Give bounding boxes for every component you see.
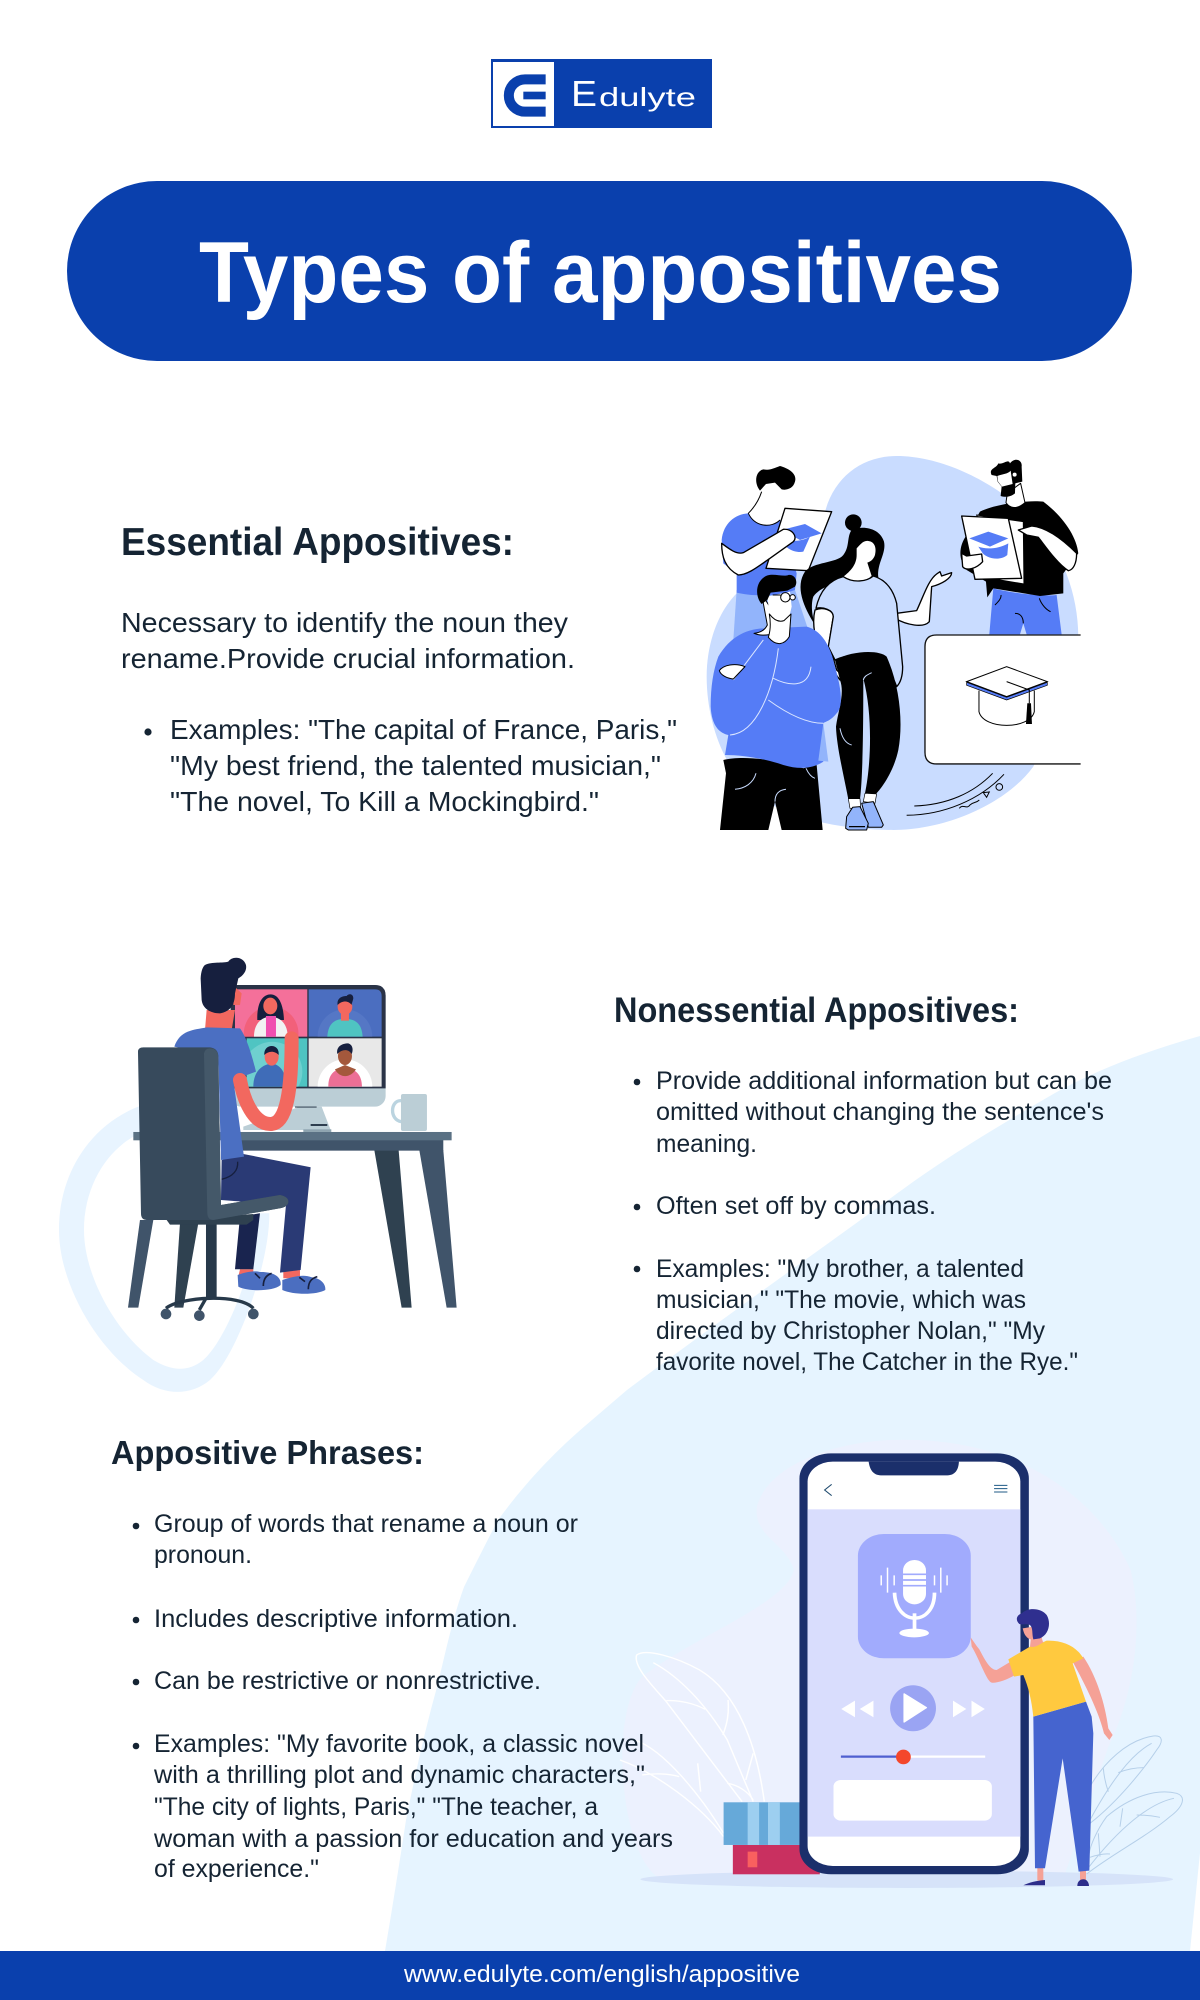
bullet: examples (144, 714, 677, 817)
person (1037, 1867, 1086, 1881)
bullet: examples: musician," "The movie, which was (656, 1286, 1026, 1314)
menu icon (994, 1485, 1007, 1492)
bullet: additional information: Provide additional information but can be (656, 1067, 1112, 1095)
microphone card (858, 1534, 971, 1658)
bullet: commas: Often set off by commas. (656, 1192, 936, 1220)
bullet: additional information: omitted without changing the sentence's (656, 1098, 1104, 1126)
bullet: examples: of experience." (154, 1855, 319, 1883)
phone (799, 1453, 1029, 1874)
video tile people (253, 994, 363, 1087)
office chair (128, 1047, 288, 1321)
illustration: group of students with graduation cap tablets (707, 456, 1081, 830)
bullet: additional information (634, 1067, 1112, 1158)
neck (754, 597, 780, 635)
progress slider (841, 1753, 903, 1760)
bullet: examples: "The novel, To Kill a Mockingbird." (170, 786, 599, 817)
heading: essential appositives: Essential Appositives: (121, 521, 514, 564)
woman legs (835, 652, 901, 799)
bullet: examples (133, 1730, 673, 1883)
logo wordmark: dulyte (599, 82, 696, 112)
bullet: examples: "My best friend, the talented musician," (170, 750, 661, 781)
man at computer (174, 958, 325, 1294)
illustration: man on video call at desk (59, 958, 457, 1392)
title: Types of appositives (199, 225, 1002, 321)
woman (801, 514, 952, 830)
woman left arm (814, 609, 848, 681)
icon: Edulyte mark (509, 79, 546, 112)
person and blue leaves (971, 1609, 1182, 1886)
man front-left (711, 575, 841, 830)
soft blob (622, 1440, 1137, 1877)
pale loop (59, 1106, 269, 1392)
bullet: examples: favorite novel, The Catcher in the Rye." (656, 1348, 1078, 1376)
man right with tablet (960, 460, 1078, 634)
blue leaves (1087, 1736, 1182, 1874)
bullet: descriptive information: Includes descriptive information. (154, 1605, 518, 1633)
phone scene (620, 1440, 1173, 1888)
bullet: additional information: meaning. (656, 1130, 757, 1158)
bullet: examples: with a thrilling plot and dynamic characters," (153, 1761, 645, 1789)
text block: definition (121, 607, 575, 674)
monitor (231, 985, 386, 1132)
decorative marks (907, 773, 1004, 815)
bullet: restrictive: Can be restrictive or nonrestrictive. (154, 1667, 541, 1695)
heading: nonessential appositives: Nonessential Appositives: (614, 991, 1019, 1030)
panel: nonessential appositives (614, 991, 1112, 1376)
bullet: examples: Examples: "My brother, a talented (656, 1255, 1024, 1283)
title banner (67, 181, 1132, 361)
bullet: examples: Examples: "My favorite book, a classic novel (154, 1730, 644, 1758)
hand on chin (768, 614, 791, 644)
logo wordmark (571, 73, 696, 114)
back chevron (825, 1484, 832, 1496)
blob (707, 456, 1078, 830)
heading: appositive phrases: Appositive Phrases: (111, 1434, 424, 1471)
tablet (766, 508, 832, 571)
footer url: www.edulyte.com/english/appositive (403, 1961, 800, 1988)
white box (833, 1780, 992, 1821)
bullet: examples: directed by Christopher Nolan," "My (656, 1317, 1045, 1345)
background: pale blue swoosh (385, 1036, 1200, 1951)
board with graduation cap (925, 635, 1081, 764)
footer bar (0, 1951, 1200, 2000)
player controls (841, 1701, 985, 1717)
books (724, 1802, 820, 1874)
bullet: group of words: Group of words that rename a noun or (154, 1510, 578, 1538)
text block: definition: Necessary to identify the noun they (121, 607, 568, 638)
panel: appositive phrases (111, 1434, 673, 1883)
text block: definition: rename.Provide crucial information. (121, 643, 575, 674)
bullet: examples: Examples: "The capital of France, Paris," (170, 714, 677, 745)
bullet: examples: woman with a passion for education and years (153, 1825, 673, 1853)
desk (133, 1132, 457, 1308)
woman right arm (895, 572, 952, 625)
logo: Edulyte (491, 59, 712, 128)
panel: essential appositives (121, 521, 677, 817)
ground shadow (640, 1871, 1173, 1888)
bullet: group of words: pronoun. (154, 1541, 252, 1569)
white leaves (620, 1653, 764, 1837)
bullet: group of words (133, 1510, 578, 1569)
illustration: phone audio player with person and books (620, 1440, 1182, 1888)
logo wordmark: E (571, 73, 597, 114)
bullet: examples (634, 1255, 1078, 1376)
man back-left (722, 466, 832, 640)
bullet: examples: "The city of lights, Paris," "The teacher, a (154, 1793, 598, 1821)
mug (393, 1094, 427, 1131)
